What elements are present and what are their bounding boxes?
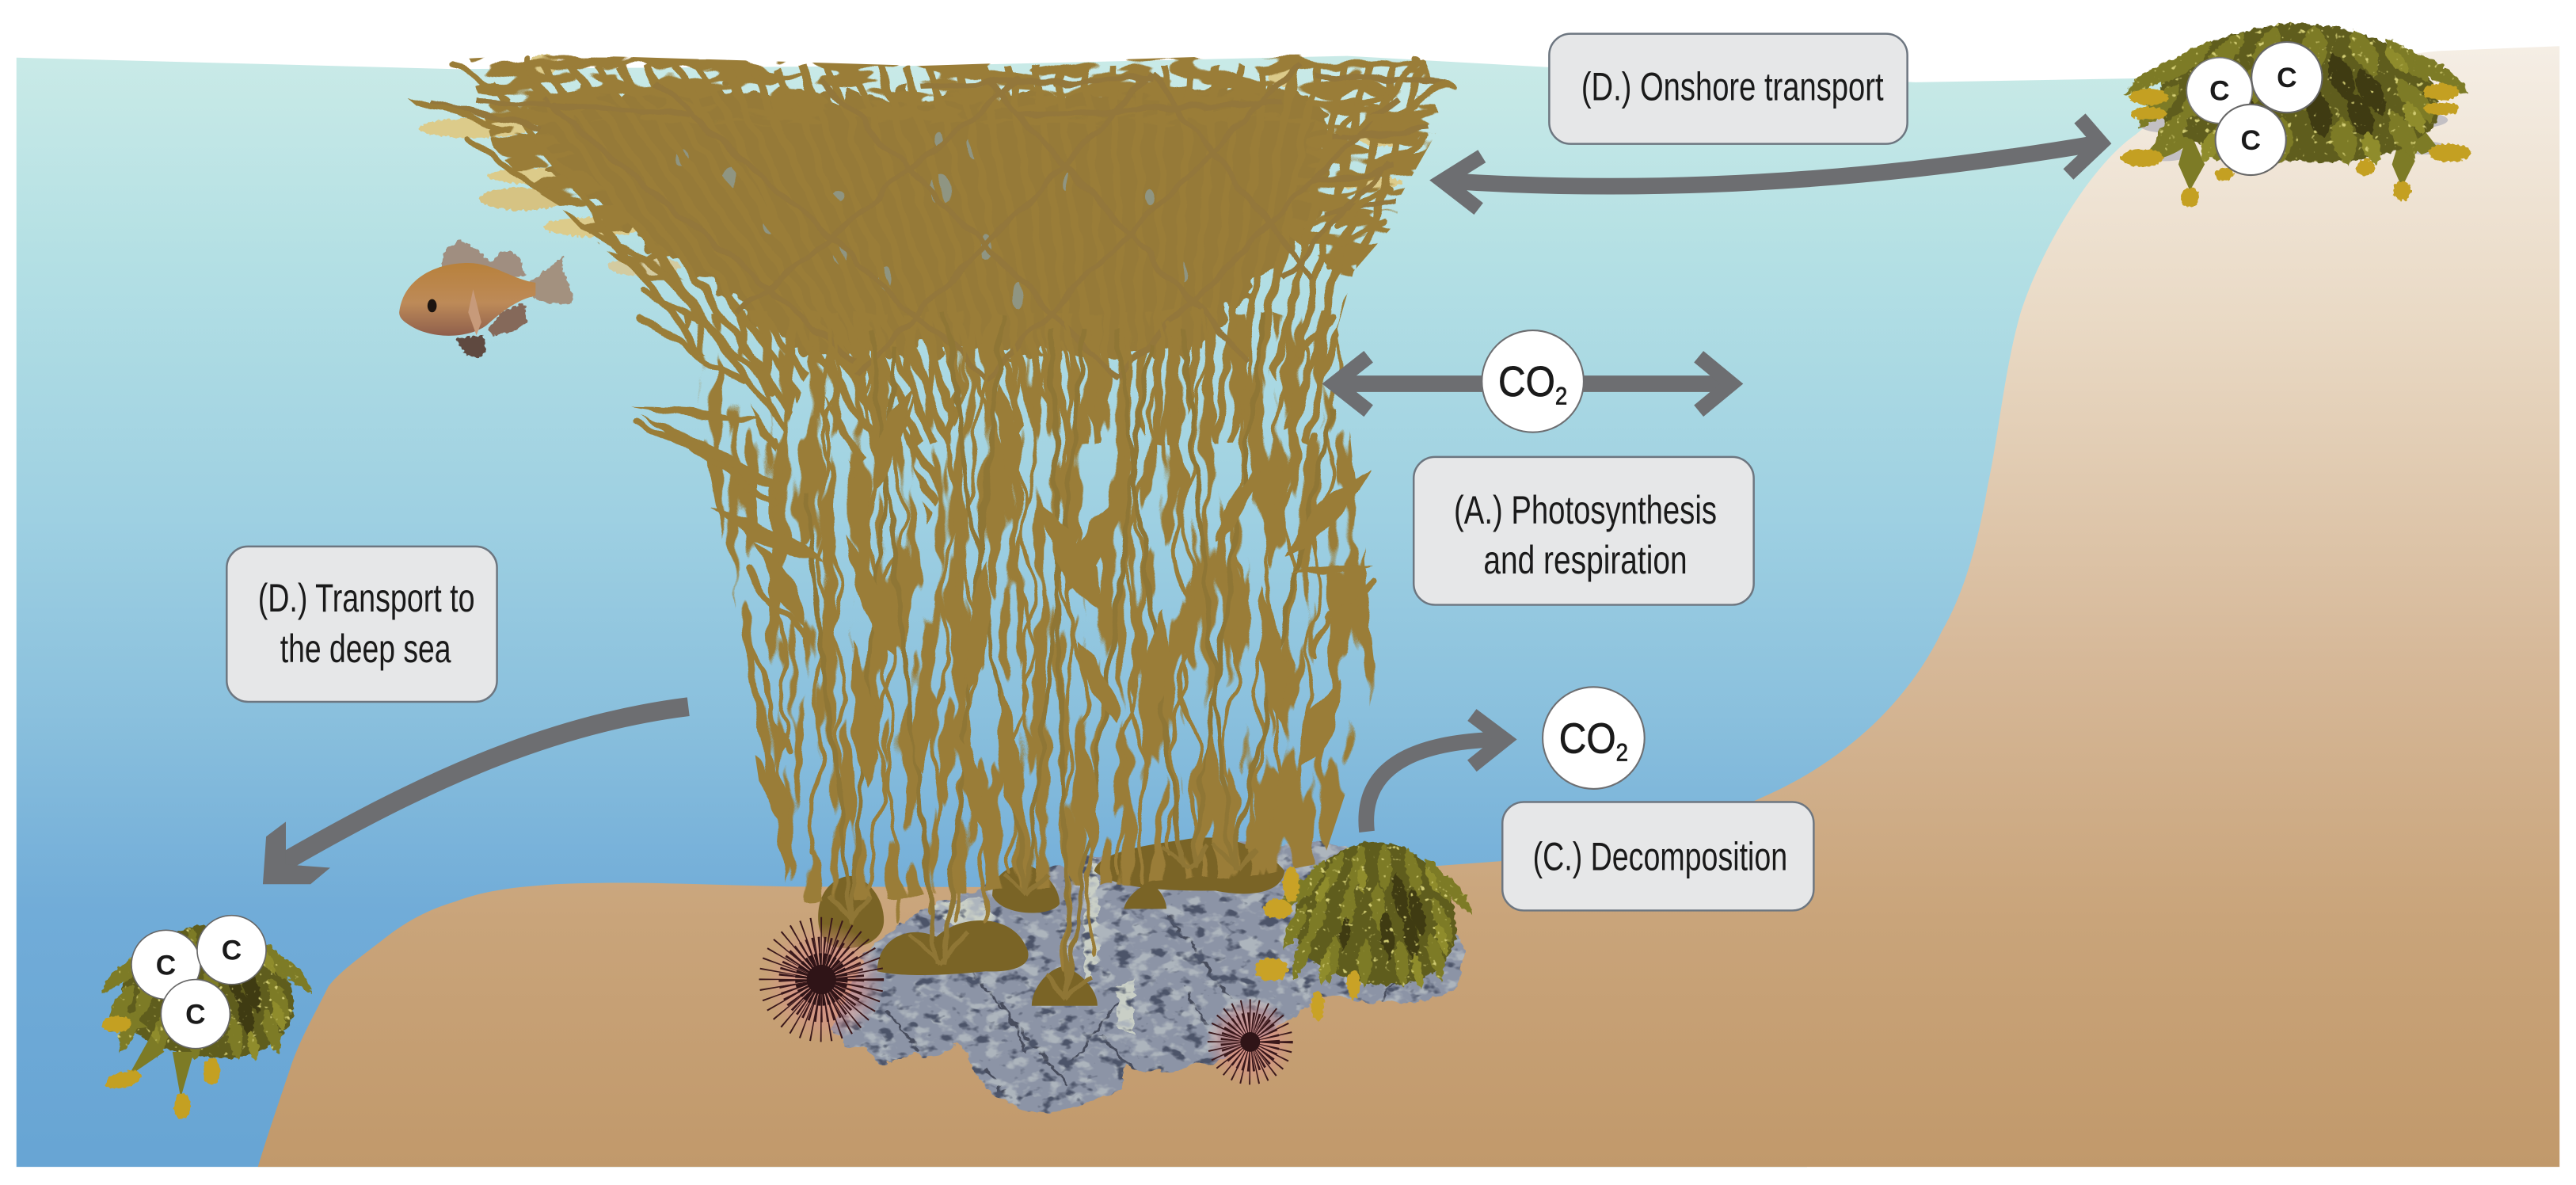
blades bbox=[631, 364, 1379, 855]
yellow canopy blades bbox=[419, 55, 1414, 276]
top edge fronds bbox=[468, 56, 1437, 280]
detached kelp clump on reef bbox=[1255, 841, 1478, 1020]
lower kelp fronds bbox=[765, 296, 1345, 970]
water body bbox=[17, 56, 2201, 1167]
label: onshore transport bbox=[1549, 34, 1908, 144]
fish bbox=[399, 240, 573, 358]
carbon circle bbox=[131, 930, 200, 999]
carbon circle: C bbox=[156, 950, 176, 981]
arrow: decomposition bbox=[1366, 715, 1505, 832]
carbon circle: C bbox=[222, 935, 242, 966]
label: decomposition: (C.) Decomposition bbox=[1533, 835, 1787, 879]
dense canopy mass bbox=[523, 86, 1330, 353]
sea urchin small bbox=[1206, 997, 1295, 1086]
kelp holdfasts bbox=[818, 837, 1284, 1006]
label: decomposition bbox=[1502, 802, 1813, 910]
CO2 circle upper: CO bbox=[1498, 358, 1562, 406]
arrow: onshore transport bbox=[1443, 118, 2101, 209]
carbon circle bbox=[161, 980, 230, 1049]
carbon circle: C bbox=[2277, 63, 2297, 93]
CO2 circle upper: 2 bbox=[1555, 382, 1567, 410]
CO2 circle upper bbox=[1482, 330, 1584, 432]
carbon circle: C bbox=[2240, 125, 2261, 156]
outlying wavy fronds bbox=[408, 58, 1455, 827]
CO2 circle lower bbox=[1543, 687, 1645, 789]
carbon circle: C bbox=[185, 1000, 206, 1031]
arrow: transport to deep sea bbox=[263, 707, 688, 884]
CO2 circle lower: 2 bbox=[1616, 739, 1628, 767]
giant kelp canopy and fronds bbox=[408, 56, 1455, 996]
label: onshore transport: (D.) Onshore transport bbox=[1581, 65, 1884, 109]
arrow: CO2 exchange bbox=[1334, 356, 1732, 411]
carbon circle bbox=[2216, 105, 2286, 175]
CO2 circle lower: CO bbox=[1559, 714, 1623, 762]
label: transport to the deep sea bbox=[226, 547, 497, 702]
stipes to holdfasts bbox=[805, 312, 1330, 996]
wrack clump on shore with carbon bbox=[2115, 23, 2478, 208]
mid-water frond thicket bbox=[682, 312, 1377, 904]
label: transport to the deep sea: (D.) Transport to bbox=[258, 576, 475, 620]
canopy fan bbox=[493, 63, 1428, 524]
carbon circle bbox=[2251, 42, 2322, 112]
label: photosynthesis and respiration: (A.) Photosynthesis bbox=[1454, 488, 1717, 532]
sea urchin large bbox=[766, 924, 884, 1042]
kelp clump in deep sea with carbon bbox=[94, 916, 318, 1119]
rock reef bbox=[831, 838, 1462, 1111]
carbon circle: C bbox=[2209, 76, 2230, 107]
label: photosynthesis and respiration bbox=[1414, 457, 1754, 605]
carbon circle bbox=[2186, 58, 2252, 124]
label: transport to the deep sea: the deep sea bbox=[280, 627, 451, 671]
label: photosynthesis and respiration: and respiration bbox=[1483, 538, 1688, 582]
carbon circle bbox=[197, 916, 266, 985]
